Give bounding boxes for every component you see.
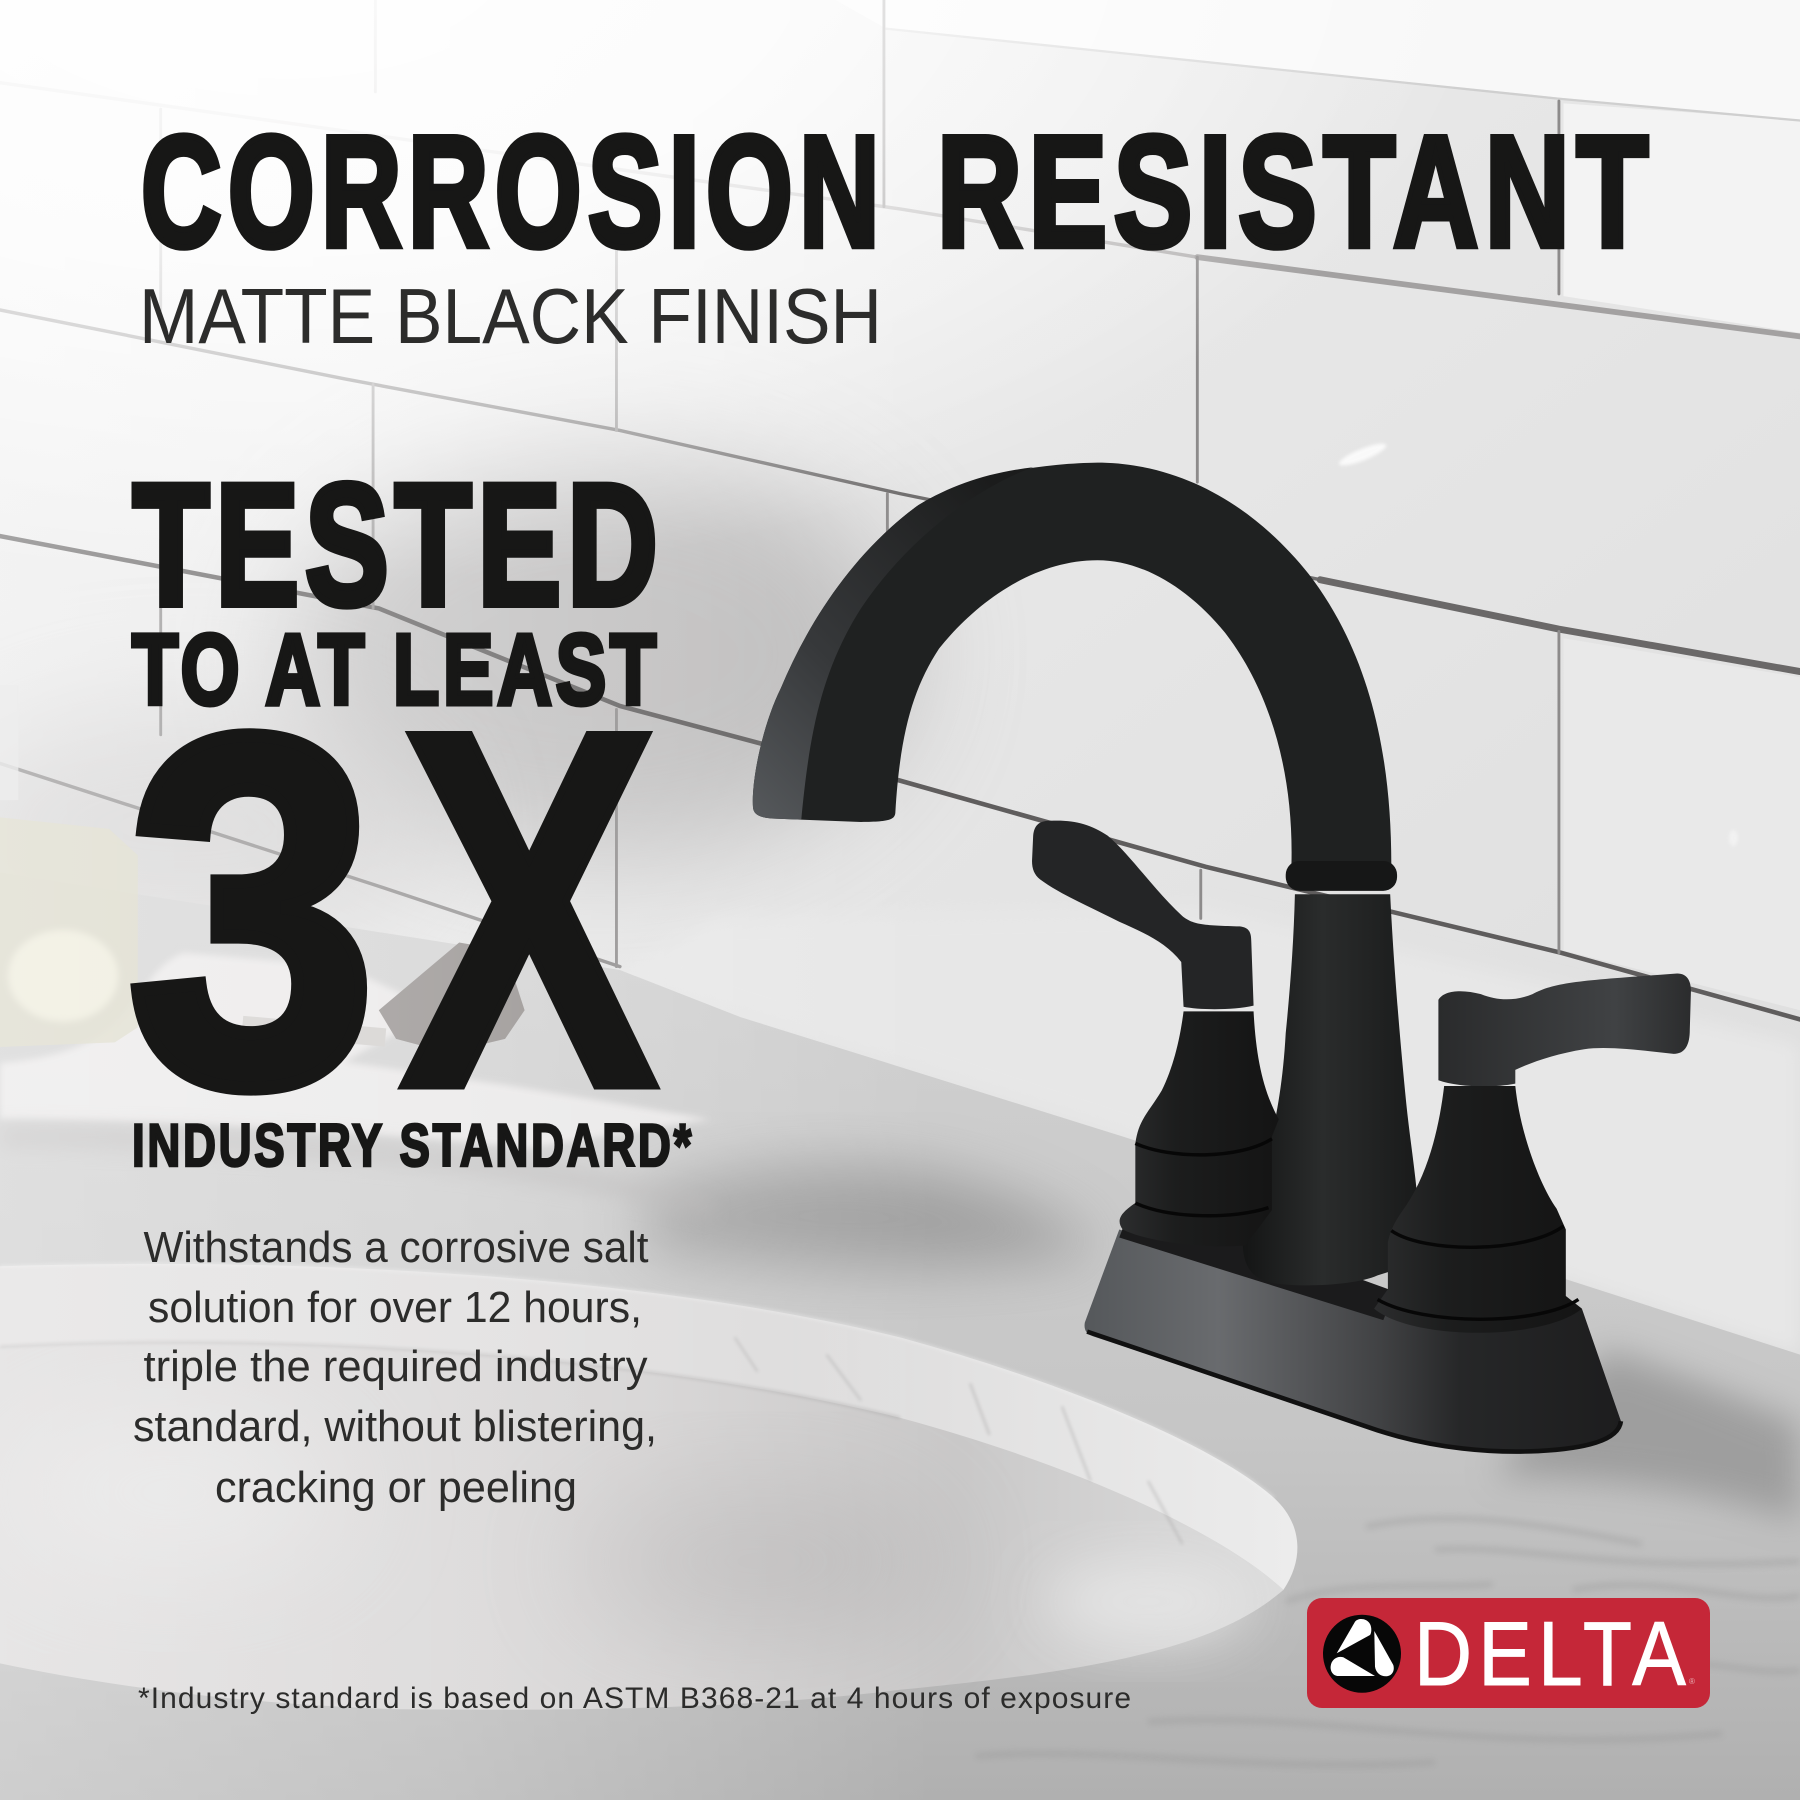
- spout collar: [1286, 861, 1397, 891]
- to at least: TO AT LEAST: [132, 614, 660, 726]
- marble counter: [0, 872, 1800, 1800]
- rim veins: [0, 1264, 1274, 1544]
- bottle cap: [0, 685, 18, 800]
- sink bowl: [0, 1329, 1283, 1710]
- subtitle: MATTE BLACK FINISH: [139, 272, 882, 360]
- centre body: [1243, 894, 1419, 1285]
- marble rim of sink: [0, 1264, 1297, 1590]
- spout lit facet: [753, 467, 1033, 820]
- footnote: *Industry standard is based on ASTM B368-21 at 4 hours of exposure: [138, 1682, 1131, 1715]
- counter shadows and veining: [643, 1164, 1800, 1765]
- left handle: [1032, 821, 1254, 1009]
- white fade overlay top: [0, 0, 1800, 689]
- Delta logo: [1307, 1598, 1710, 1708]
- brush: [379, 942, 525, 1053]
- bottle: [0, 817, 138, 1047]
- base plate: [1085, 1228, 1621, 1452]
- logo wordmark: DELTA: [1414, 1604, 1692, 1705]
- description text: standard, without blistering,: [133, 1402, 657, 1451]
- industry standard: INDUSTRY STANDARD*: [132, 1112, 694, 1179]
- counter edge soft band: [0, 1125, 712, 1217]
- wall tiles: [0, 0, 1800, 1378]
- spout: [753, 463, 1391, 864]
- description text: solution for over 12 hours,: [148, 1283, 642, 1332]
- description text: Withstands a corrosive salt: [144, 1223, 648, 1272]
- description text: cracking or peeling: [215, 1463, 577, 1512]
- bowl shading: [0, 1412, 1251, 1642]
- tray: [0, 953, 712, 1148]
- wall shading: [0, 103, 1800, 1355]
- title: [141, 104, 1655, 280]
- tested: TESTED: [133, 449, 664, 641]
- right handle: [1438, 973, 1691, 1086]
- grout lines: [0, 0, 1800, 1019]
- bottle contents: [8, 930, 118, 1022]
- callout: tested to at least 3x: [127, 449, 694, 1193]
- description text: [133, 1223, 657, 1512]
- faucet: [753, 463, 1691, 1452]
- title word: corrosion: CORROSION: [141, 104, 886, 280]
- registered mark: ®: [1689, 1677, 1695, 1686]
- numeral 3: 3: [127, 632, 377, 1189]
- letter X: X: [400, 625, 660, 1193]
- blurred bottle, tray and brush: [0, 685, 712, 1217]
- brush handle: [242, 1016, 386, 1047]
- upper white cabinet band: [836, 0, 1800, 121]
- right valve: [1374, 1086, 1582, 1333]
- left valve: [1120, 1011, 1279, 1246]
- logo background: [1307, 1598, 1710, 1708]
- description text: triple the required industry: [144, 1342, 648, 1391]
- tile glints: [1337, 440, 1738, 846]
- logo icon: [1323, 1615, 1401, 1693]
